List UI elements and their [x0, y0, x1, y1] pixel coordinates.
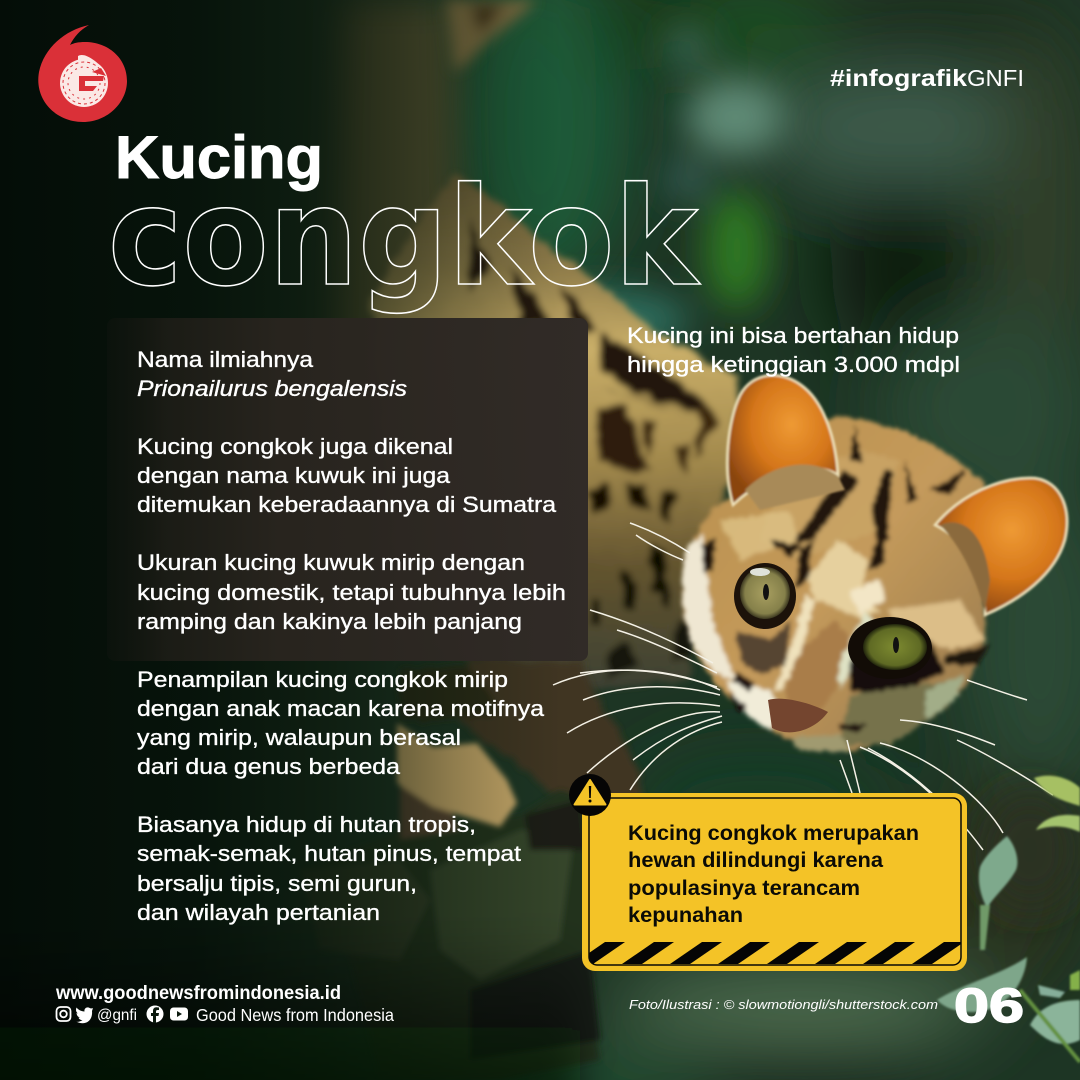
- main text: [137, 347, 566, 925]
- fact: habitat: Biasanya hidup di hutan tropis,: [137, 812, 476, 837]
- hashtag: #infografik: [830, 65, 967, 91]
- icon: facebook: [146, 1006, 164, 1023]
- cat head: [682, 417, 990, 752]
- page name: Good News from Indonesia: [196, 1005, 394, 1025]
- cat ear front: [935, 478, 1067, 615]
- fact: appearance: Penampilan kucing congkok mirip: [137, 667, 508, 692]
- hazard stripes: [573, 942, 964, 964]
- cat body: [370, 175, 737, 690]
- fact: other name: dengan nama kuwuk ini juga: [137, 463, 451, 488]
- fact: other name: [137, 434, 557, 517]
- title: congkok: [108, 159, 701, 317]
- fact: size: kucing domestik, tetapi tubuhnya lebih: [137, 580, 566, 605]
- altitude fact: hingga ketinggian 3.000 mdpl: [627, 352, 960, 377]
- cat paw: [397, 723, 517, 840]
- leaves: [937, 776, 1080, 1062]
- fact: scientific name: Nama ilmiahnya: [137, 347, 314, 372]
- fact: size: ramping dan kakinya lebih panjang: [137, 609, 522, 634]
- social row: [56, 1005, 394, 1025]
- hashtag: GNFI: [967, 65, 1024, 91]
- logo: [38, 25, 127, 122]
- logo emblem: [60, 55, 108, 107]
- website: www.goodnewsfromindonesia.id: [55, 983, 341, 1004]
- title: Kucing: [115, 124, 323, 191]
- cat ear back: [727, 375, 845, 510]
- warning text: [628, 821, 919, 927]
- warning text: Kucing congkok merupakan: [628, 821, 919, 845]
- cat leg: [400, 660, 640, 800]
- fact: other name: Kucing congkok juga dikenal: [137, 434, 453, 459]
- warning text: kepunahan: [628, 903, 743, 927]
- fact: habitat: [137, 812, 521, 925]
- warning text: hewan dilindungi karena: [628, 848, 884, 872]
- handle: @gnfi: [97, 1007, 137, 1024]
- fact: appearance: dari dua genus berbeda: [137, 754, 401, 779]
- icon: instagram: [56, 1007, 70, 1021]
- icon: twitter: [76, 1007, 93, 1023]
- page number: 06: [954, 980, 1024, 1033]
- altitude fact: Kucing ini bisa bertahan hidup: [627, 323, 959, 348]
- photo credit: Foto/Ilustrasi : © slowmotiongli/shutterstock.com: [629, 997, 938, 1012]
- warning icon: [569, 774, 611, 816]
- fact: habitat: dan wilayah pertanian: [137, 900, 380, 925]
- fact: scientific name: [137, 347, 407, 401]
- branch: [300, 790, 600, 1080]
- fact: appearance: dengan anak macan karena motifnya: [137, 696, 545, 721]
- fact: appearance: yang mirip, walaupun berasal: [137, 725, 461, 750]
- fact: size: [137, 550, 566, 634]
- whiskers: [553, 523, 1053, 850]
- text panel: [107, 318, 588, 661]
- cat eyes: [734, 563, 932, 679]
- cat nose: [768, 699, 828, 732]
- hashtag: [830, 65, 1024, 91]
- icon: youtube: [170, 1008, 188, 1020]
- bright bokeh: [330, 0, 1080, 910]
- fact: habitat: bersalju tipis, semi gurun,: [137, 871, 417, 896]
- fact: other name: ditemukan keberadaannya di Sumatra: [137, 492, 557, 517]
- warning callout: [569, 774, 967, 971]
- fact: habitat: semak-semak, hutan pinus, tempat: [137, 841, 521, 866]
- warning text: populasinya terancam: [628, 876, 860, 900]
- fact: size: Ukuran kucing kuwuk mirip dengan: [137, 550, 525, 575]
- fur at top: [445, 0, 536, 72]
- fact: appearance: [137, 667, 545, 779]
- altitude fact: [627, 323, 960, 377]
- fact: scientific name: Prionailurus bengalensis: [137, 376, 407, 401]
